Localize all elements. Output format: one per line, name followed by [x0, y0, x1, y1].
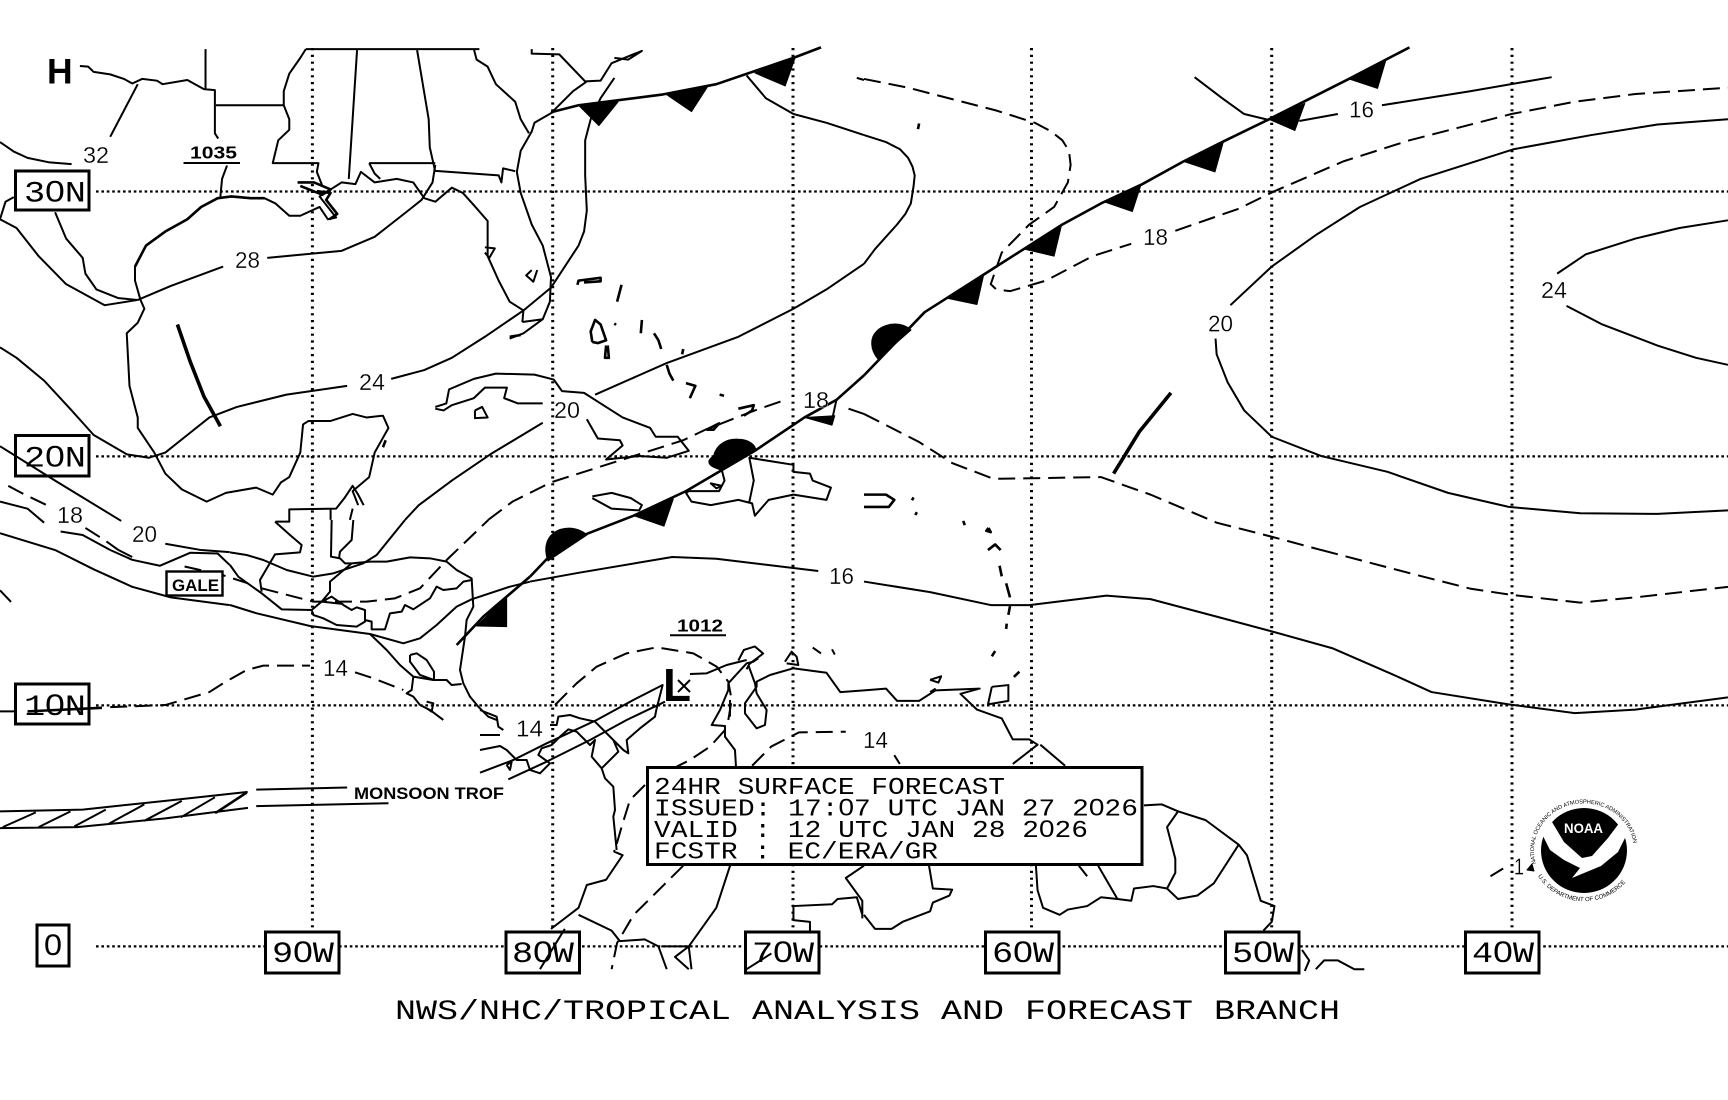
surface troughs	[177, 324, 1171, 474]
isobar value labels: 24	[1541, 277, 1567, 303]
forecast info box	[648, 768, 1142, 867]
icon: NOAA logo: NATIONAL OCEANIC AND ATMOSPHERIC ADMINISTRATION	[1530, 800, 1638, 864]
longitude label: 80W: 80W	[512, 936, 574, 972]
isobar value labels: 18	[57, 502, 83, 528]
gale warning label: GALE	[172, 576, 219, 595]
isobar value labels: 18	[1143, 224, 1168, 250]
cold front off the US east coast	[551, 47, 821, 126]
stationary/cold front across the Atlantic and Caribbean	[457, 47, 1409, 645]
isobar value labels: 14	[516, 716, 543, 742]
latitude label: 0: 0	[44, 929, 62, 962]
gale warning label	[166, 572, 222, 596]
latitude label: 30N: 30N	[24, 176, 86, 212]
high pressure value: 1035: 1035	[190, 143, 237, 163]
latitude label: 0	[37, 925, 69, 966]
longitude label: 60W: 60W	[992, 936, 1054, 972]
icon: NOAA logo: U.S. DEPARTMENT OF COMMERCE	[1538, 874, 1626, 902]
icon: NOAA logo: NOAA	[1564, 820, 1603, 836]
longitude label: 90W: 90W	[272, 936, 334, 972]
lat/lon dotted grid	[96, 48, 1728, 946]
latitude label: 20N: 20N	[24, 440, 86, 476]
isobar value labels: 20	[1208, 310, 1233, 336]
longitude label: 40W: 40W	[1472, 936, 1534, 972]
longitude label: 70W: 70W	[752, 936, 814, 972]
low pressure value: 1012: 1012	[677, 615, 723, 635]
high pressure value: 1035	[184, 143, 240, 163]
isobar value labels: 18	[803, 387, 829, 413]
solid isobars	[0, 75, 1728, 713]
isobar value labels: 16	[1349, 96, 1374, 122]
label: monsoon trough: MONSOON TROF	[354, 784, 504, 803]
coastlines and political borders	[55, 49, 1364, 971]
forecast info box: FCSTR : EC/ERA/GR	[654, 840, 938, 867]
footer credit: NWS/NHC/TROPICAL ANALYSIS AND FORECAST BRANCH	[395, 997, 1340, 1028]
forecast info box: ISSUED: 17: 07 UTC JAN 27 2 026	[654, 794, 1138, 824]
isobar value labels	[57, 96, 1567, 880]
high pressure center: H: H	[47, 52, 73, 92]
isobar value labels: 28	[235, 247, 260, 273]
isobar value labels: 20	[132, 521, 157, 547]
forecast info box: 24HR SURFACE FORECAST	[654, 775, 1005, 802]
isobar value labels: 1	[1514, 854, 1524, 880]
isobar value labels: 20	[554, 397, 580, 423]
isobar value labels: 32	[83, 142, 109, 168]
latitude label: 10N: 10N	[24, 689, 86, 725]
isobar value labels: 14	[863, 727, 888, 753]
icon: NOAA logo	[1526, 800, 1638, 902]
isobar value labels: 14	[323, 655, 348, 681]
forecast info box: VALID : 12 UTC JAN 28 2 026	[654, 816, 1088, 845]
isobar value labels: 24	[359, 369, 385, 395]
low pressure value: 1012	[670, 615, 726, 635]
isobar value labels: 16	[829, 563, 854, 589]
low pressure center: L with x: L	[663, 659, 691, 711]
monsoon trough	[0, 685, 665, 828]
longitude label: 50W: 50W	[1232, 936, 1294, 972]
